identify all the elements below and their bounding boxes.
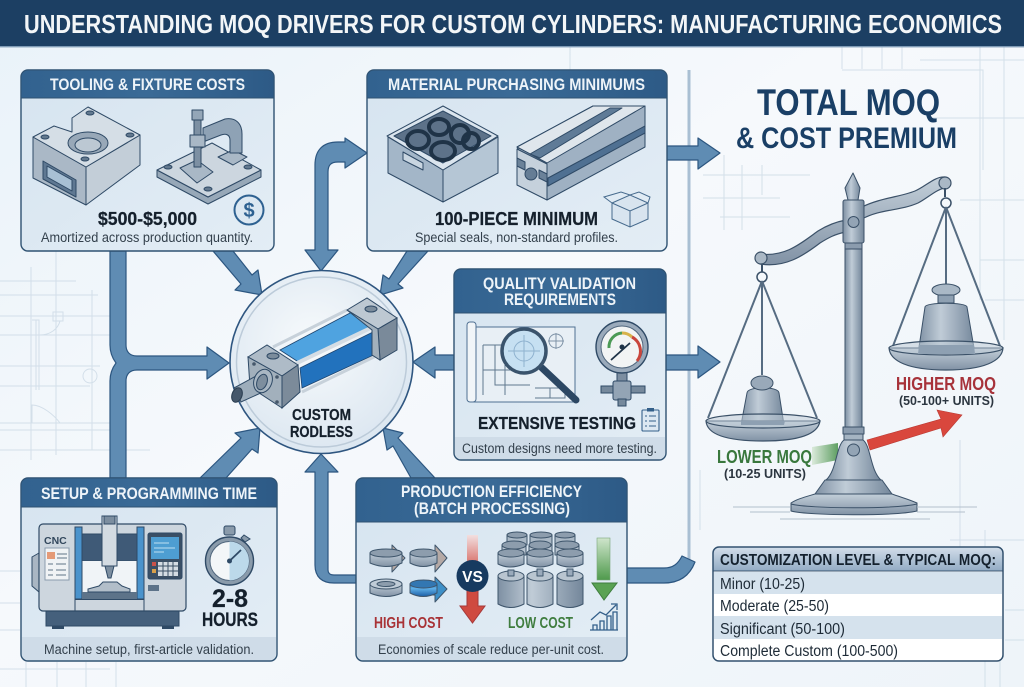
panel header: tooling xyxy=(21,70,274,98)
arrow: quality to total xyxy=(666,346,720,378)
arrow: red increase xyxy=(867,410,962,450)
icon: clamp fixture xyxy=(157,110,261,204)
arrow: material to hub xyxy=(380,251,428,295)
caption: quality: Custom designs need more testing. xyxy=(462,441,657,456)
icon: checklist xyxy=(642,408,659,431)
icon: aluminium extrusion xyxy=(517,106,645,200)
stat: minimum pieces: 100-PIECE MINIMUM xyxy=(435,209,598,229)
panel header: production: (BATCH PROCESSING) xyxy=(414,500,570,518)
panel: material purchasing minimums xyxy=(367,70,667,251)
icon: cnc machine xyxy=(32,516,186,629)
panel: production efficiency xyxy=(356,478,627,661)
icon: growth chart xyxy=(590,604,618,630)
stat: setup hours: HOURS xyxy=(202,610,258,631)
row: complete custom: Complete Custom (100-500) xyxy=(720,643,898,660)
footer band: production xyxy=(357,637,626,660)
arrow: two-way hub to material xyxy=(305,138,367,271)
icon: open box xyxy=(604,192,650,227)
icon: vs badge with red arrow xyxy=(456,535,488,623)
panel header: material: MATERIAL PURCHASING MINIMUMS xyxy=(388,76,645,94)
arrow: green fade xyxy=(812,443,838,465)
row: minor: Minor (10-25) xyxy=(720,576,805,593)
stat: cost range: $500-$5,000 xyxy=(98,209,197,229)
stat: setup hours xyxy=(202,585,258,631)
footer band: setup xyxy=(22,637,276,660)
hub: custom rodless cylinder xyxy=(230,270,413,454)
panel header: production: PRODUCTION EFFICIENCY xyxy=(401,483,582,501)
icon: vs badge with red arrow: VS xyxy=(462,569,483,586)
label: custom rodless: RODLESS xyxy=(290,424,353,441)
footer band: quality xyxy=(455,437,665,459)
scale shadow lines xyxy=(733,507,977,519)
right pan assembly xyxy=(889,188,1003,370)
panel: quality validation requirements xyxy=(454,269,666,460)
icon: crate of seals xyxy=(387,106,498,202)
caption: setup: Machine setup, first-article validation. xyxy=(44,642,254,657)
arrow: material to total xyxy=(667,138,720,169)
arrow: setup to hub xyxy=(200,428,260,478)
panel header: quality xyxy=(454,269,666,313)
label: low cost: LOW COST xyxy=(508,615,573,632)
arrow: quality to hub xyxy=(413,347,454,378)
icon: cylinder xyxy=(230,298,397,408)
arrow: right-side feedback rail xyxy=(627,70,695,583)
table header xyxy=(713,547,1003,571)
icon: blueprint and magnifier xyxy=(467,322,576,402)
balance scale xyxy=(706,173,1003,519)
arrow: tooling to hub xyxy=(213,251,262,295)
icon: dollar coin xyxy=(234,196,264,224)
label: lower moq: (10-25 UNITS) xyxy=(724,466,806,481)
stat: extensive testing: EXTENSIVE TESTING xyxy=(478,413,636,433)
panel header: production xyxy=(356,478,627,522)
table: customization level and typical moq xyxy=(713,547,1003,661)
icon: stopwatch xyxy=(206,526,254,585)
row: moderate: Moderate (25-50) xyxy=(720,598,829,615)
row: significant: Significant (50-100) xyxy=(720,621,845,638)
heading: total moq and cost premium xyxy=(736,82,957,155)
stat: setup hours: 2-8 xyxy=(212,585,248,613)
piston rod xyxy=(234,376,263,402)
panel header: tooling: TOOLING & FIXTURE COSTS xyxy=(50,76,245,94)
label: lower moq xyxy=(717,447,812,481)
row: significant xyxy=(714,616,1002,639)
icon: machined block xyxy=(33,107,140,205)
label: higher moq: (50-100+ UNITS) xyxy=(899,393,994,408)
left pan assembly xyxy=(706,264,820,441)
panel header: quality: QUALITY VALIDATION xyxy=(483,275,636,293)
panel header: quality: REQUIREMENTS xyxy=(504,291,616,309)
caption: material: Special seals, non-standard profiles. xyxy=(415,230,618,245)
scale beam xyxy=(760,177,948,265)
rear end cap xyxy=(347,298,397,329)
label: custom rodless: CUSTOM xyxy=(292,407,351,424)
heading: total moq and cost premium: TOTAL MOQ xyxy=(757,82,940,123)
panel header: material xyxy=(367,70,667,98)
label: higher moq: HIGHER MOQ xyxy=(896,374,996,394)
label: high cost: HIGH COST xyxy=(374,615,443,632)
front end cap xyxy=(248,345,298,376)
arrow: tooling down to setup with branch to hub xyxy=(110,251,229,478)
label: lower moq: LOWER MOQ xyxy=(717,447,812,467)
icon: cnc machine: CNC xyxy=(44,535,67,547)
label: custom rodless xyxy=(290,407,353,441)
row: minor xyxy=(714,572,1002,594)
panel: setup and programming time xyxy=(21,478,277,661)
barrel halves xyxy=(280,312,377,363)
title bar xyxy=(0,0,1024,47)
panel: tooling and fixture costs xyxy=(21,70,274,251)
panel header: setup: SETUP & PROGRAMMING TIME xyxy=(41,485,257,503)
panel header: setup xyxy=(21,478,277,507)
arrow: production to hub bottom xyxy=(305,454,356,583)
icon: dollar coin: $ xyxy=(243,200,255,222)
caption: tooling: Amortized across production quantity. xyxy=(41,230,253,245)
icon: batch of parts xyxy=(498,532,583,608)
icon: single-piece flow rings xyxy=(370,545,447,602)
arrow: production to hub xyxy=(383,428,435,478)
icon: pressure gauge xyxy=(596,321,648,406)
scale pillar xyxy=(791,173,917,515)
heading: total moq and cost premium: & COST PREMIUM xyxy=(736,122,957,155)
label: higher moq xyxy=(896,374,996,408)
icon: green down arrow xyxy=(592,538,617,600)
caption: production: Economies of scale reduce per-unit cost. xyxy=(378,642,604,657)
